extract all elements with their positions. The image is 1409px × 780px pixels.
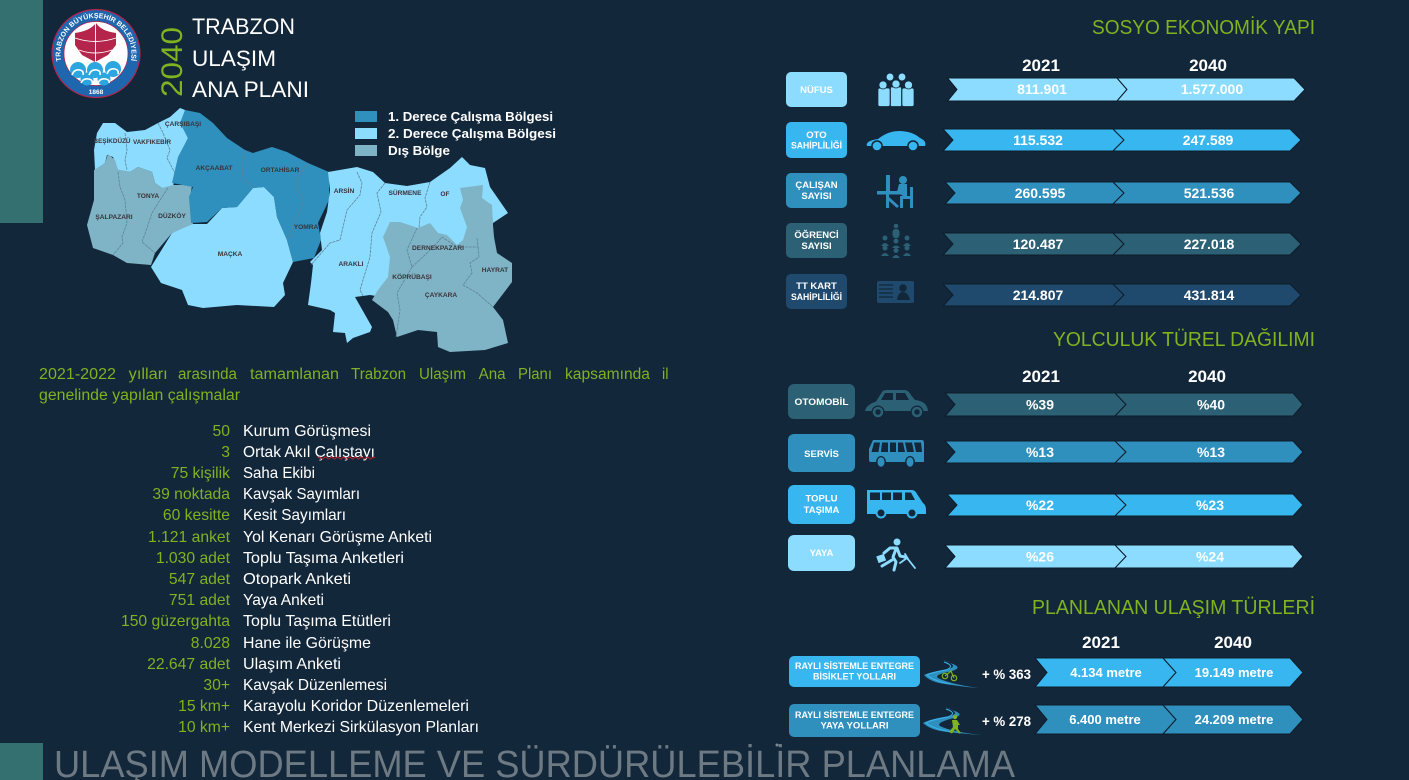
heading: socio-economic: SOSYO EKONOMİK YAPI [1092,16,1315,39]
row: population: 1.577.000 [1181,81,1243,97]
work list: 22.647 adet [147,656,231,673]
row: cycle paths: + % 363 [982,666,1031,682]
row: cycle paths: BİSİKLET YOLLARI [813,672,896,682]
row: employees: 521.536 [1184,185,1235,201]
map: Trabzon districts: HAYRAT [482,267,508,274]
row: public transport: %23 [1196,497,1224,513]
work list: 39 noktada [152,486,230,503]
intro paragraph [39,366,668,404]
intro paragraph: Ulaşım [419,366,466,383]
row: pedestrian paths: YAYA YOLLARI [820,720,888,732]
row: students: ÖĞRENCİ [794,229,839,241]
row: TT card holders: 214.807 [1013,287,1064,303]
row: pedestrian: YAYA [810,548,834,559]
row: students: 120.487 [1013,236,1064,252]
work list: Saha Ekibi [243,465,315,482]
heading: modal split: YOLCULUK TÜREL DAĞILIMI [1053,328,1315,351]
row: pedestrian paths: 6.400 metre [1069,712,1141,727]
intro paragraph: Trabzon [351,366,406,383]
work list: Yol Kenarı Görüşme Anketi [243,529,432,546]
work list: Yaya Anketi [243,592,324,609]
row: public transport: TOPLU [805,494,838,504]
map: Trabzon districts: ARAKLI [339,261,364,268]
row: TT card holders [786,274,1301,309]
map legend: 2. Derece Çalışma Bölgesi [388,126,556,141]
row: employees: SAYISI [801,191,832,202]
intro paragraph: tamamlanan [250,366,339,383]
title: ANA PLANI [192,77,309,102]
row: car ownership: 247.589 [1183,132,1234,148]
year headers: 2021 [1082,633,1120,652]
year headers [1022,56,1227,75]
row: car ownership: OTO [806,130,827,141]
work list: Kurum Görüşmesi [243,423,371,440]
work list: 60 kesitte [163,507,230,524]
year headers: 2040 [1214,633,1252,652]
year headers: 2021 [1022,367,1060,386]
row: employees: ÇALIŞAN [795,180,838,191]
map: Trabzon districts: MAÇKA [218,251,243,258]
intro paragraph: genelinde yapılan çalışmalar [39,387,240,404]
row: shuttle service [788,434,1303,472]
work list: Hane ile Görüşme [243,635,371,652]
title: TRABZON [192,14,295,39]
row: car ownership: SAHİPLİLİĞİ [791,140,842,152]
map: Trabzon districts: VAKFIKEBİR [133,138,171,146]
year headers: 2021 [1022,56,1060,75]
work list: 30+ [203,677,230,694]
work list: Kesit Sayımları [243,507,346,524]
row: automobile: OTOMOBİL [794,397,849,408]
row: students: 227.018 [1184,236,1235,252]
work list: Kent Merkezi Sirkülasyon Planları [243,719,479,736]
map: Trabzon districts: YOMRA [294,224,319,231]
title: ULAŞIM [192,46,276,71]
logo: Trabzon Büyükşehir Belediyesi [51,8,141,98]
intro paragraph: Ana [479,366,506,383]
map: Trabzon districts: ÇAYKARA [425,292,457,299]
panel: socio-economic structure [786,16,1315,309]
work list: 547 adet [169,571,231,588]
intro paragraph: Planı [518,366,552,383]
panel: modal split [788,328,1315,571]
work list: Kavşak Düzenlemesi [243,677,387,694]
row: pedestrian paths: + % 278 [982,713,1031,729]
map legend: Dış Bölge [388,143,450,158]
map: Trabzon districts: SÜRMENE [389,188,422,197]
map: Trabzon districts: DÜZKÖY [158,211,187,220]
row: public transport [788,485,1303,524]
row: shuttle service: %13 [1026,444,1054,460]
row: shuttle service: %13 [1197,444,1225,460]
work list [121,423,479,736]
intro paragraph: arasında [178,366,237,383]
intro paragraph: 2021-2022 [39,366,116,383]
row: public transport: TAŞIMA [804,505,839,516]
row: employees [786,173,1301,208]
intro paragraph: kapsamında [565,366,650,383]
map: Trabzon districts: ARSİN [334,187,354,195]
map: Trabzon districts: BEŞİKDÜZÜ [94,136,131,145]
intro paragraph: il [662,366,668,383]
map: Trabzon districts: DERNEKPAZARI [412,245,464,252]
work list: Toplu Taşıma Etütleri [243,613,391,630]
work list: Kavşak Sayımları [243,486,360,503]
row: cycle paths: 19.149 metre [1195,665,1273,680]
decorative bar: bottom left [0,743,43,780]
row: automobile: %40 [1197,396,1225,412]
map: Trabzon districts: ORTAHİSAR [261,166,300,174]
title [192,14,309,102]
work list: 8.028 [191,635,230,652]
year headers [1022,367,1226,386]
row: TT card holders: 431.814 [1184,287,1235,303]
row: pedestrian [788,535,1303,571]
work list: 15 km+ [178,698,230,715]
map legend: 1. Derece Çalışma Bölgesi [388,109,553,124]
row: population: 811.901 [1017,81,1067,97]
row: cycle paths: 4.134 metre [1070,665,1142,680]
row: employees: 260.595 [1015,185,1066,201]
heading: planned types: PLANLANAN ULAŞIM TÜRLERİ [1032,596,1315,619]
work list: Toplu Taşıma Anketleri [243,550,404,567]
decorative bar: top left [0,0,43,223]
work list: Karayolu Koridor Düzenlemeleri [243,698,469,715]
work list: 1.030 adet [156,550,231,567]
map legend [355,109,556,158]
row: TT card holders: SAHİPLİLİĞİ [791,291,842,303]
work list: Ortak Akıl Çalıştayı [243,444,375,461]
work list: 75 kişilik [171,465,230,482]
row: automobile [788,384,1303,419]
map: Trabzon districts: ÇARŞIBAŞI [165,121,201,128]
row: pedestrian paths: 24.209 metre [1195,712,1273,727]
row: students: SAYISI [801,241,832,252]
row: population: NÜFUS [800,85,833,96]
work list: 10 km+ [178,719,230,736]
row: cycle paths [789,656,1303,688]
work list: 150 güzergahta [121,613,230,630]
row: pedestrian: %24 [1196,548,1224,564]
work list: Otopark Anketi [243,571,351,588]
row: pedestrian paths [789,704,1303,737]
row: students [786,223,1301,258]
map: Trabzon districts: KÖPRÜBAŞI [392,272,432,281]
logo: Trabzon Büyükşehir Belediyesi: 1868 [89,89,104,96]
row: shuttle service: SERVİS [804,449,839,460]
intro paragraph: yılları [129,366,168,383]
map: Trabzon districts: ŞALPAZARI [95,214,133,221]
row: car ownership [786,122,1301,158]
work list: Ulaşım Anketi [243,656,341,673]
work list: 50 [213,423,230,440]
map: Trabzon districts: OF [440,191,450,198]
year headers: 2040 [1189,56,1227,75]
row: public transport: %22 [1026,497,1054,513]
row: cycle paths: RAYLI SİSTEMLE ENTEGRE [795,661,914,672]
row: TT card holders: TT KART [796,281,837,292]
vertical year 2040: 2040 [156,27,189,97]
row: pedestrian: %26 [1026,548,1054,564]
row: automobile: %39 [1026,396,1054,412]
logo: Trabzon Büyükşehir Belediyesi: TRABZON BÜYÜKŞEHİR BELEDİYESİ [56,13,137,62]
row: pedestrian paths: RAYLI SİSTEMLE ENTEGRE [795,710,914,721]
row: population [786,72,1305,107]
work list: 1.121 anket [148,529,231,546]
work list: 751 adet [169,592,231,609]
map: Trabzon districts: TONYA [137,193,159,200]
year headers: 2040 [1188,367,1226,386]
year headers [1082,633,1252,652]
panel: planned transport types [789,596,1315,737]
row: car ownership: 115.532 [1013,132,1063,148]
map: Trabzon districts: AKÇAABAT [196,165,232,172]
map: Trabzon districts [87,108,512,352]
work list: 3 [221,444,230,461]
